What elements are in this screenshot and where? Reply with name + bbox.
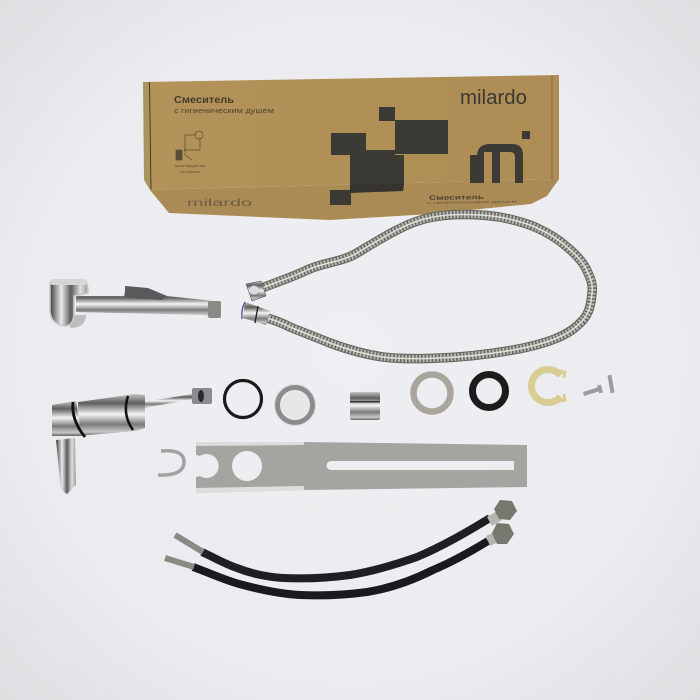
box: product title: Смеситель	[174, 95, 234, 106]
mounting plate	[196, 442, 527, 493]
hose: lower fitting	[165, 558, 194, 567]
hose: upper connector	[246, 281, 266, 301]
brass C-clip	[531, 370, 565, 403]
hose: upper nut	[487, 500, 517, 526]
mixer: cylinder	[78, 394, 145, 436]
hose: lower	[193, 541, 488, 595]
box: left edge	[143, 82, 151, 190]
mixer: rod	[143, 394, 194, 408]
mixer: end cap	[52, 401, 82, 436]
mixer: knob	[192, 388, 212, 404]
metal washer	[414, 374, 450, 412]
cardboard box	[143, 75, 559, 220]
sprayer: rear collar	[70, 315, 86, 328]
threaded nut	[350, 392, 380, 420]
hose: lower nut	[486, 523, 514, 546]
hose: lower connector	[242, 302, 270, 325]
box: flap title: Смеситель	[429, 194, 484, 202]
screws	[583, 375, 615, 396]
mixer cartridge body	[52, 388, 212, 494]
box: front face	[143, 75, 559, 190]
box: installation caption: монтируется	[175, 163, 205, 168]
hose: upper	[202, 518, 490, 578]
box: product subtitle: с гигиеническим душем	[174, 108, 274, 115]
sprayer: head	[50, 280, 88, 326]
flexible water hoses	[165, 500, 517, 595]
sprayer: threaded tip	[208, 301, 221, 318]
black rubber washer	[472, 374, 506, 408]
box: large m logo	[470, 131, 530, 183]
mixer: lever handle	[56, 438, 76, 494]
mixer: knob socket	[198, 390, 204, 402]
box: flap subtitle: с гигиеническим душем	[427, 199, 518, 205]
sprayer: trigger	[125, 286, 167, 300]
hygienic shower head	[50, 279, 221, 328]
O-ring	[224, 380, 262, 418]
chrome escutcheon ring	[274, 384, 316, 426]
box: black pixel pattern	[330, 107, 448, 205]
box: right edge	[551, 75, 553, 180]
metal shower hose	[242, 214, 592, 359]
hose: upper fitting	[175, 535, 203, 552]
mixer: seal rings	[73, 402, 85, 437]
box: milardo brand: milardo	[460, 87, 527, 109]
cardboard box: на унитаз	[180, 169, 200, 174]
box: installation icon	[176, 131, 203, 160]
sprayer: barrel	[76, 292, 221, 317]
box: flap brand: milardo	[187, 198, 253, 209]
box: bottom flap	[150, 179, 559, 220]
horseshoe clip	[158, 451, 184, 475]
